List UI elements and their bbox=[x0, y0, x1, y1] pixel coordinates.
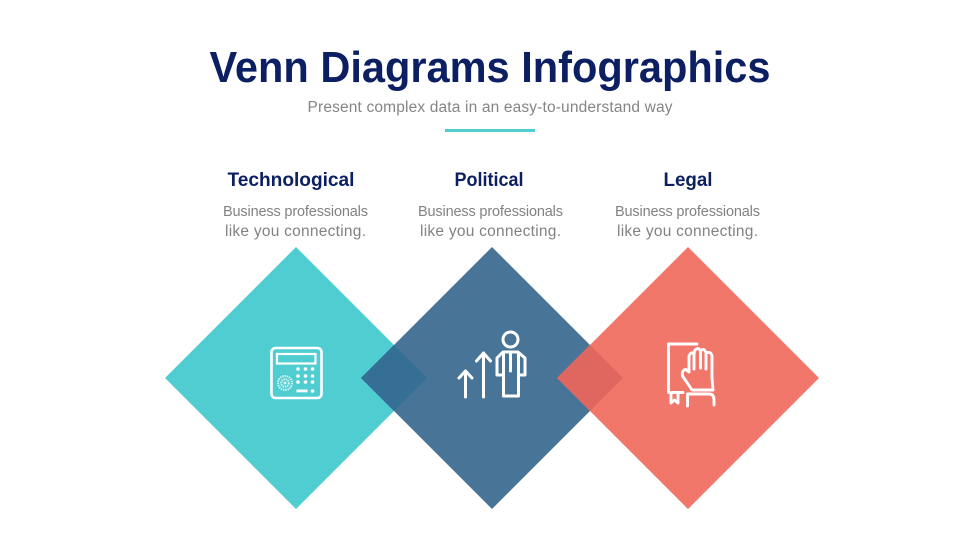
text block: Political description bbox=[418, 204, 563, 240]
icon: person with rising arrows bbox=[459, 332, 525, 397]
subtitle: Present complex data in an easy-to-understand way bbox=[308, 99, 673, 116]
heading: Political: Political bbox=[454, 170, 524, 191]
text block: Political description: Business professionals bbox=[418, 204, 563, 220]
text block: Technological description: like you connecting. bbox=[225, 223, 366, 240]
title: Venn Diagrams Infographics bbox=[210, 44, 770, 92]
overlap: teal and blue bbox=[361, 345, 427, 411]
diamond: red bbox=[557, 247, 819, 509]
text block: Technological description bbox=[223, 204, 368, 240]
heading: Legal: Legal bbox=[664, 170, 712, 191]
title accent bar bbox=[445, 129, 535, 132]
heading: Technological: Technological bbox=[228, 170, 354, 191]
text block: Technological description: Business professionals bbox=[223, 204, 368, 220]
text block: Legal description bbox=[615, 204, 760, 240]
text block: Political description: like you connecting. bbox=[420, 223, 561, 240]
diamond: teal bbox=[165, 247, 427, 509]
icon: hand on book bbox=[668, 344, 714, 406]
icon: calculator with fingerprint bbox=[272, 348, 322, 398]
overlap: blue and red bbox=[557, 345, 623, 411]
text block: Legal description: Business professionals bbox=[615, 204, 760, 220]
text block: Legal description: like you connecting. bbox=[617, 223, 758, 240]
diamond: blue bbox=[361, 247, 623, 509]
